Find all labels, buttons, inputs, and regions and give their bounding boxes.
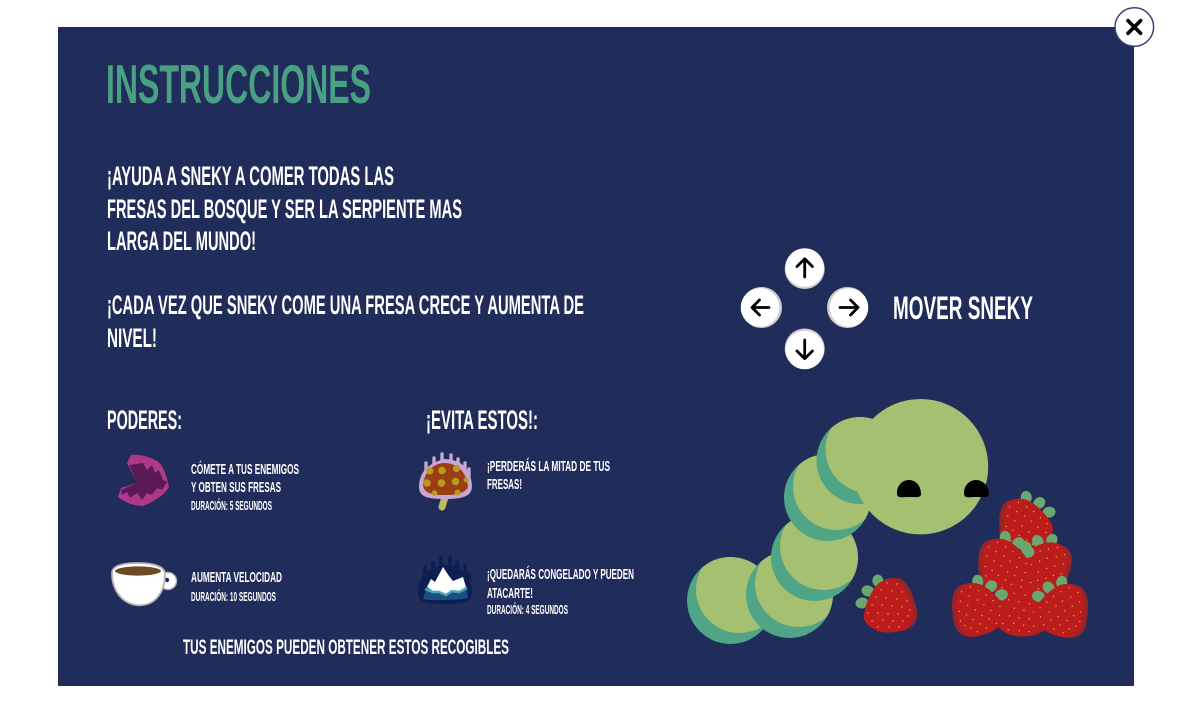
- text block: eat enemies: DURACIÓN: 5 SEGUNDOS: [191, 498, 272, 513]
- illustration: strawberry pile: [939, 482, 1101, 647]
- icon: mushroom: [419, 454, 472, 507]
- icon: monster mouth: [118, 455, 169, 506]
- illustration: single strawberry: [855, 573, 917, 634]
- icon: ice mushroom: [418, 557, 472, 604]
- text block: intro: [107, 161, 462, 256]
- text block: intro: FRESAS DEL BOSQUE Y SER LA SERPIENTE MAS: [107, 194, 462, 224]
- heading: powers: PODERES:: [107, 405, 182, 435]
- snake body segment 4: [784, 455, 869, 541]
- icon: coffee cup: [112, 563, 176, 605]
- text block: frozen: [487, 566, 634, 617]
- icon: left key: [741, 287, 782, 328]
- text block: lose half: [487, 458, 610, 493]
- close button: [1115, 8, 1154, 46]
- text block: eat enemies: [191, 460, 299, 513]
- heading: avoid: ¡EVITA ESTOS!:: [426, 405, 538, 435]
- icon: down key: [785, 328, 825, 369]
- text block: growth: NIVEL!: [107, 323, 157, 353]
- title: INSTRUCCIONES: [106, 53, 371, 115]
- snake left eye: [897, 480, 921, 497]
- text block: frozen: DURACIÓN: 4 SEGUNDOS: [487, 602, 568, 617]
- icon: right key: [827, 287, 868, 328]
- text block: eat enemies: Y OBTEN SUS FRESAS: [191, 480, 281, 496]
- text block: intro: LARGA DEL MUNDO!: [107, 226, 256, 256]
- snake body segment 5: [816, 417, 873, 504]
- snake body segment 2: [746, 555, 833, 638]
- text block: eat enemies: CÓMETE A TUS ENEMIGOS: [191, 460, 299, 478]
- icon: up key: [785, 248, 825, 289]
- text block: frozen: ¡QUEDARÁS CONGELADO Y PUEDEN: [487, 566, 634, 583]
- arrow keys: [741, 248, 868, 369]
- text block: speed: DURACIÓN: 10 SEGUNDOS: [191, 589, 276, 604]
- text block: frozen: ATACARTE!: [487, 586, 533, 602]
- text block: growth: [107, 290, 584, 353]
- snake head: [853, 399, 988, 534]
- text block: lose half: FRESAS!: [487, 477, 522, 493]
- text block: growth: ¡CADA VEZ QUE SNEKY COME UNA FRESA CRECE Y AUMENTA DE: [107, 290, 584, 320]
- footer note: TUS ENEMIGOS PUEDEN OBTENER ESTOS RECOGIBLES: [183, 635, 509, 659]
- label: move sneky: MOVER SNEKY: [893, 290, 1033, 326]
- snake right eye: [964, 480, 989, 497]
- illustration: sneky snake: [687, 399, 989, 644]
- snake body segment 3: [771, 521, 858, 601]
- snake body segment 1: [687, 557, 764, 644]
- text block: lose half: ¡PERDERÁS LA MITAD DE TUS: [487, 458, 610, 475]
- text block: speed: AUMENTA VELOCIDAD: [191, 570, 282, 586]
- text block: speed: [191, 570, 282, 604]
- text block: intro: ¡AYUDA A SNEKY A COMER TODAS LAS: [107, 161, 394, 191]
